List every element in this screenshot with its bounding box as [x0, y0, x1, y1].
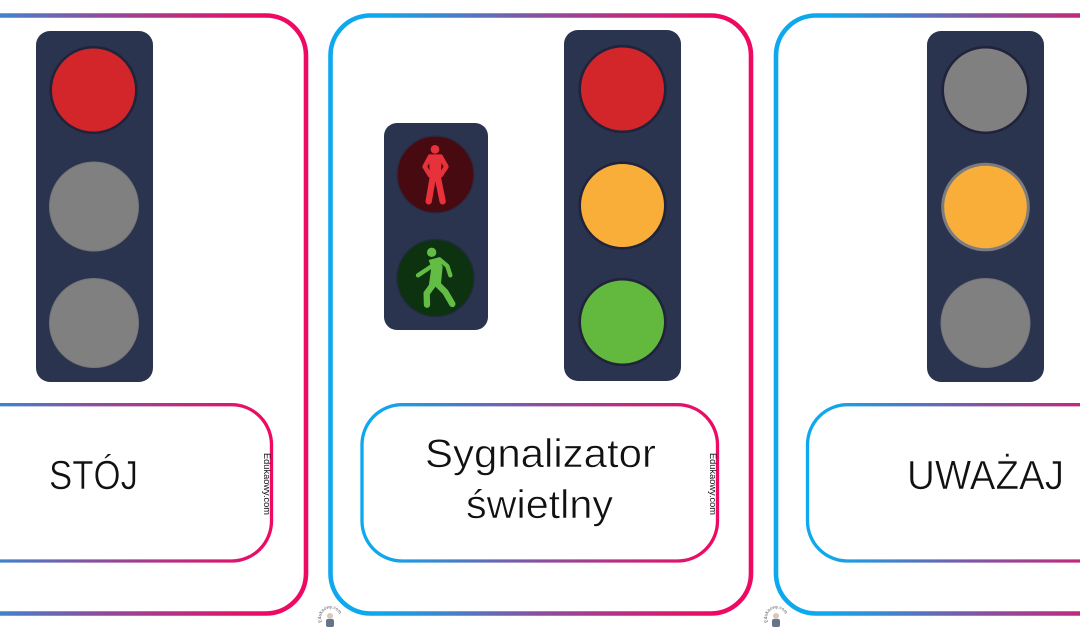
label text: UWAŻAJ: UWAŻAJ [907, 452, 1064, 498]
label box: Sygnalizator świetlny [362, 405, 718, 561]
panel: Sygnalizator świetlny card [330, 16, 751, 614]
icon: green walking figure [418, 248, 452, 305]
label text: Sygnalizator świetlny: Sygnalizator [425, 432, 656, 476]
logo badge right: Edukaowy.com [764, 606, 787, 623]
label box: STÓJ [0, 405, 272, 561]
label box: UWAŻAJ [808, 405, 1080, 561]
pedestrian signal [384, 123, 488, 330]
traffic light: red on [36, 31, 153, 382]
label text: STÓJ: STÓJ [49, 452, 138, 498]
logo badge left: Edukaowy.com [318, 606, 341, 623]
label text: Sygnalizator świetlny [425, 432, 656, 527]
card frame [330, 16, 751, 614]
card frame [0, 16, 306, 614]
label text: Sygnalizator świetlny: świetlny [466, 483, 613, 527]
card frame [776, 16, 1080, 614]
icon: red standing figure [425, 145, 446, 201]
panel: UWAŻAJ card [776, 16, 1080, 614]
watermark: Edukaowy.com [707, 453, 718, 515]
watermark: Edukaowy.com [261, 453, 272, 515]
traffic light: amber on [927, 31, 1044, 382]
traffic light: all lamps on [564, 30, 681, 381]
panel: STÓJ card [0, 16, 306, 614]
